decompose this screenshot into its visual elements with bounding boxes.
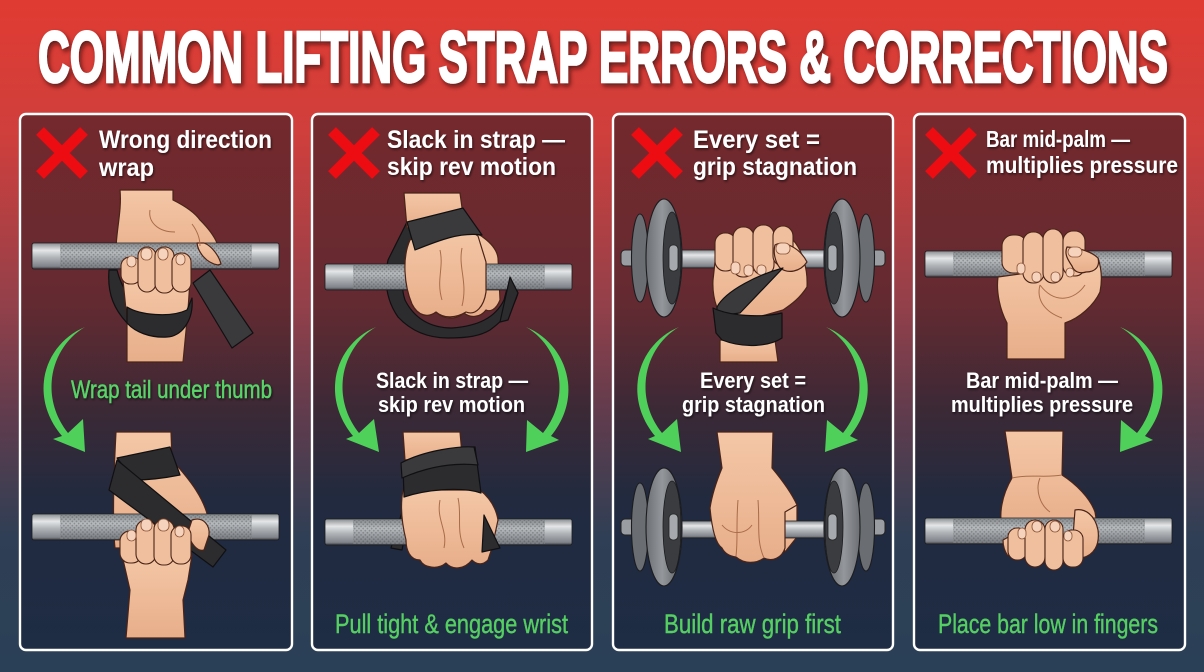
error heading [986, 126, 1178, 178]
panel: slack in strap [312, 114, 592, 650]
icon: red cross [635, 131, 679, 175]
illustration: mid-palm grip [925, 229, 1172, 359]
illustration: low-in-fingers grip [925, 431, 1172, 570]
illustration: raw dumbbell grip [621, 432, 885, 586]
illustration: strapped dumbbell grip [621, 199, 885, 362]
panel: bar mid-palm [914, 114, 1185, 650]
fix label: Every set = [700, 368, 806, 393]
arrow: down to correction [44, 327, 85, 452]
fix note: Pull tight & engage wrist [335, 609, 568, 639]
illustration: wrong wrap grip [32, 190, 279, 362]
error heading: wrap [98, 154, 154, 182]
error heading: Wrong direction [99, 126, 272, 154]
arrows: down to correction [335, 327, 568, 452]
icon: red cross [929, 131, 973, 175]
arrow: down to correction [1120, 327, 1162, 452]
illustration: slack strap [325, 193, 572, 338]
icon: red cross [40, 131, 84, 175]
icon: red cross [332, 131, 376, 175]
panel: wrong direction wrap [20, 114, 292, 650]
fix note: Build raw grip first [664, 609, 841, 639]
fix label [951, 368, 1133, 417]
fix label: grip stagnation [682, 392, 825, 417]
error heading: grip stagnation [693, 153, 857, 181]
error heading [98, 126, 272, 182]
fix label [682, 368, 825, 417]
fix label: Slack in strap — [376, 368, 528, 393]
fix label: multiplies pressure [951, 392, 1133, 417]
arrows: down to correction [637, 327, 868, 452]
error heading: Every set = [693, 126, 820, 154]
error heading: multiplies pressure [986, 152, 1178, 178]
fix label: skip rev motion [378, 392, 525, 417]
illustration: correct wrap grip [32, 432, 279, 638]
illustration: tight strap [325, 432, 572, 568]
fix label: Bar mid-palm — [966, 368, 1118, 393]
fix label: Wrap tail under thumb [71, 376, 272, 404]
error heading [693, 126, 857, 181]
error heading [387, 126, 565, 181]
fix label [376, 368, 528, 417]
panel: every set [613, 114, 893, 650]
error heading: Bar mid-palm — [986, 126, 1130, 152]
error heading: Slack in strap — [387, 126, 565, 154]
error heading: skip rev motion [387, 153, 556, 181]
